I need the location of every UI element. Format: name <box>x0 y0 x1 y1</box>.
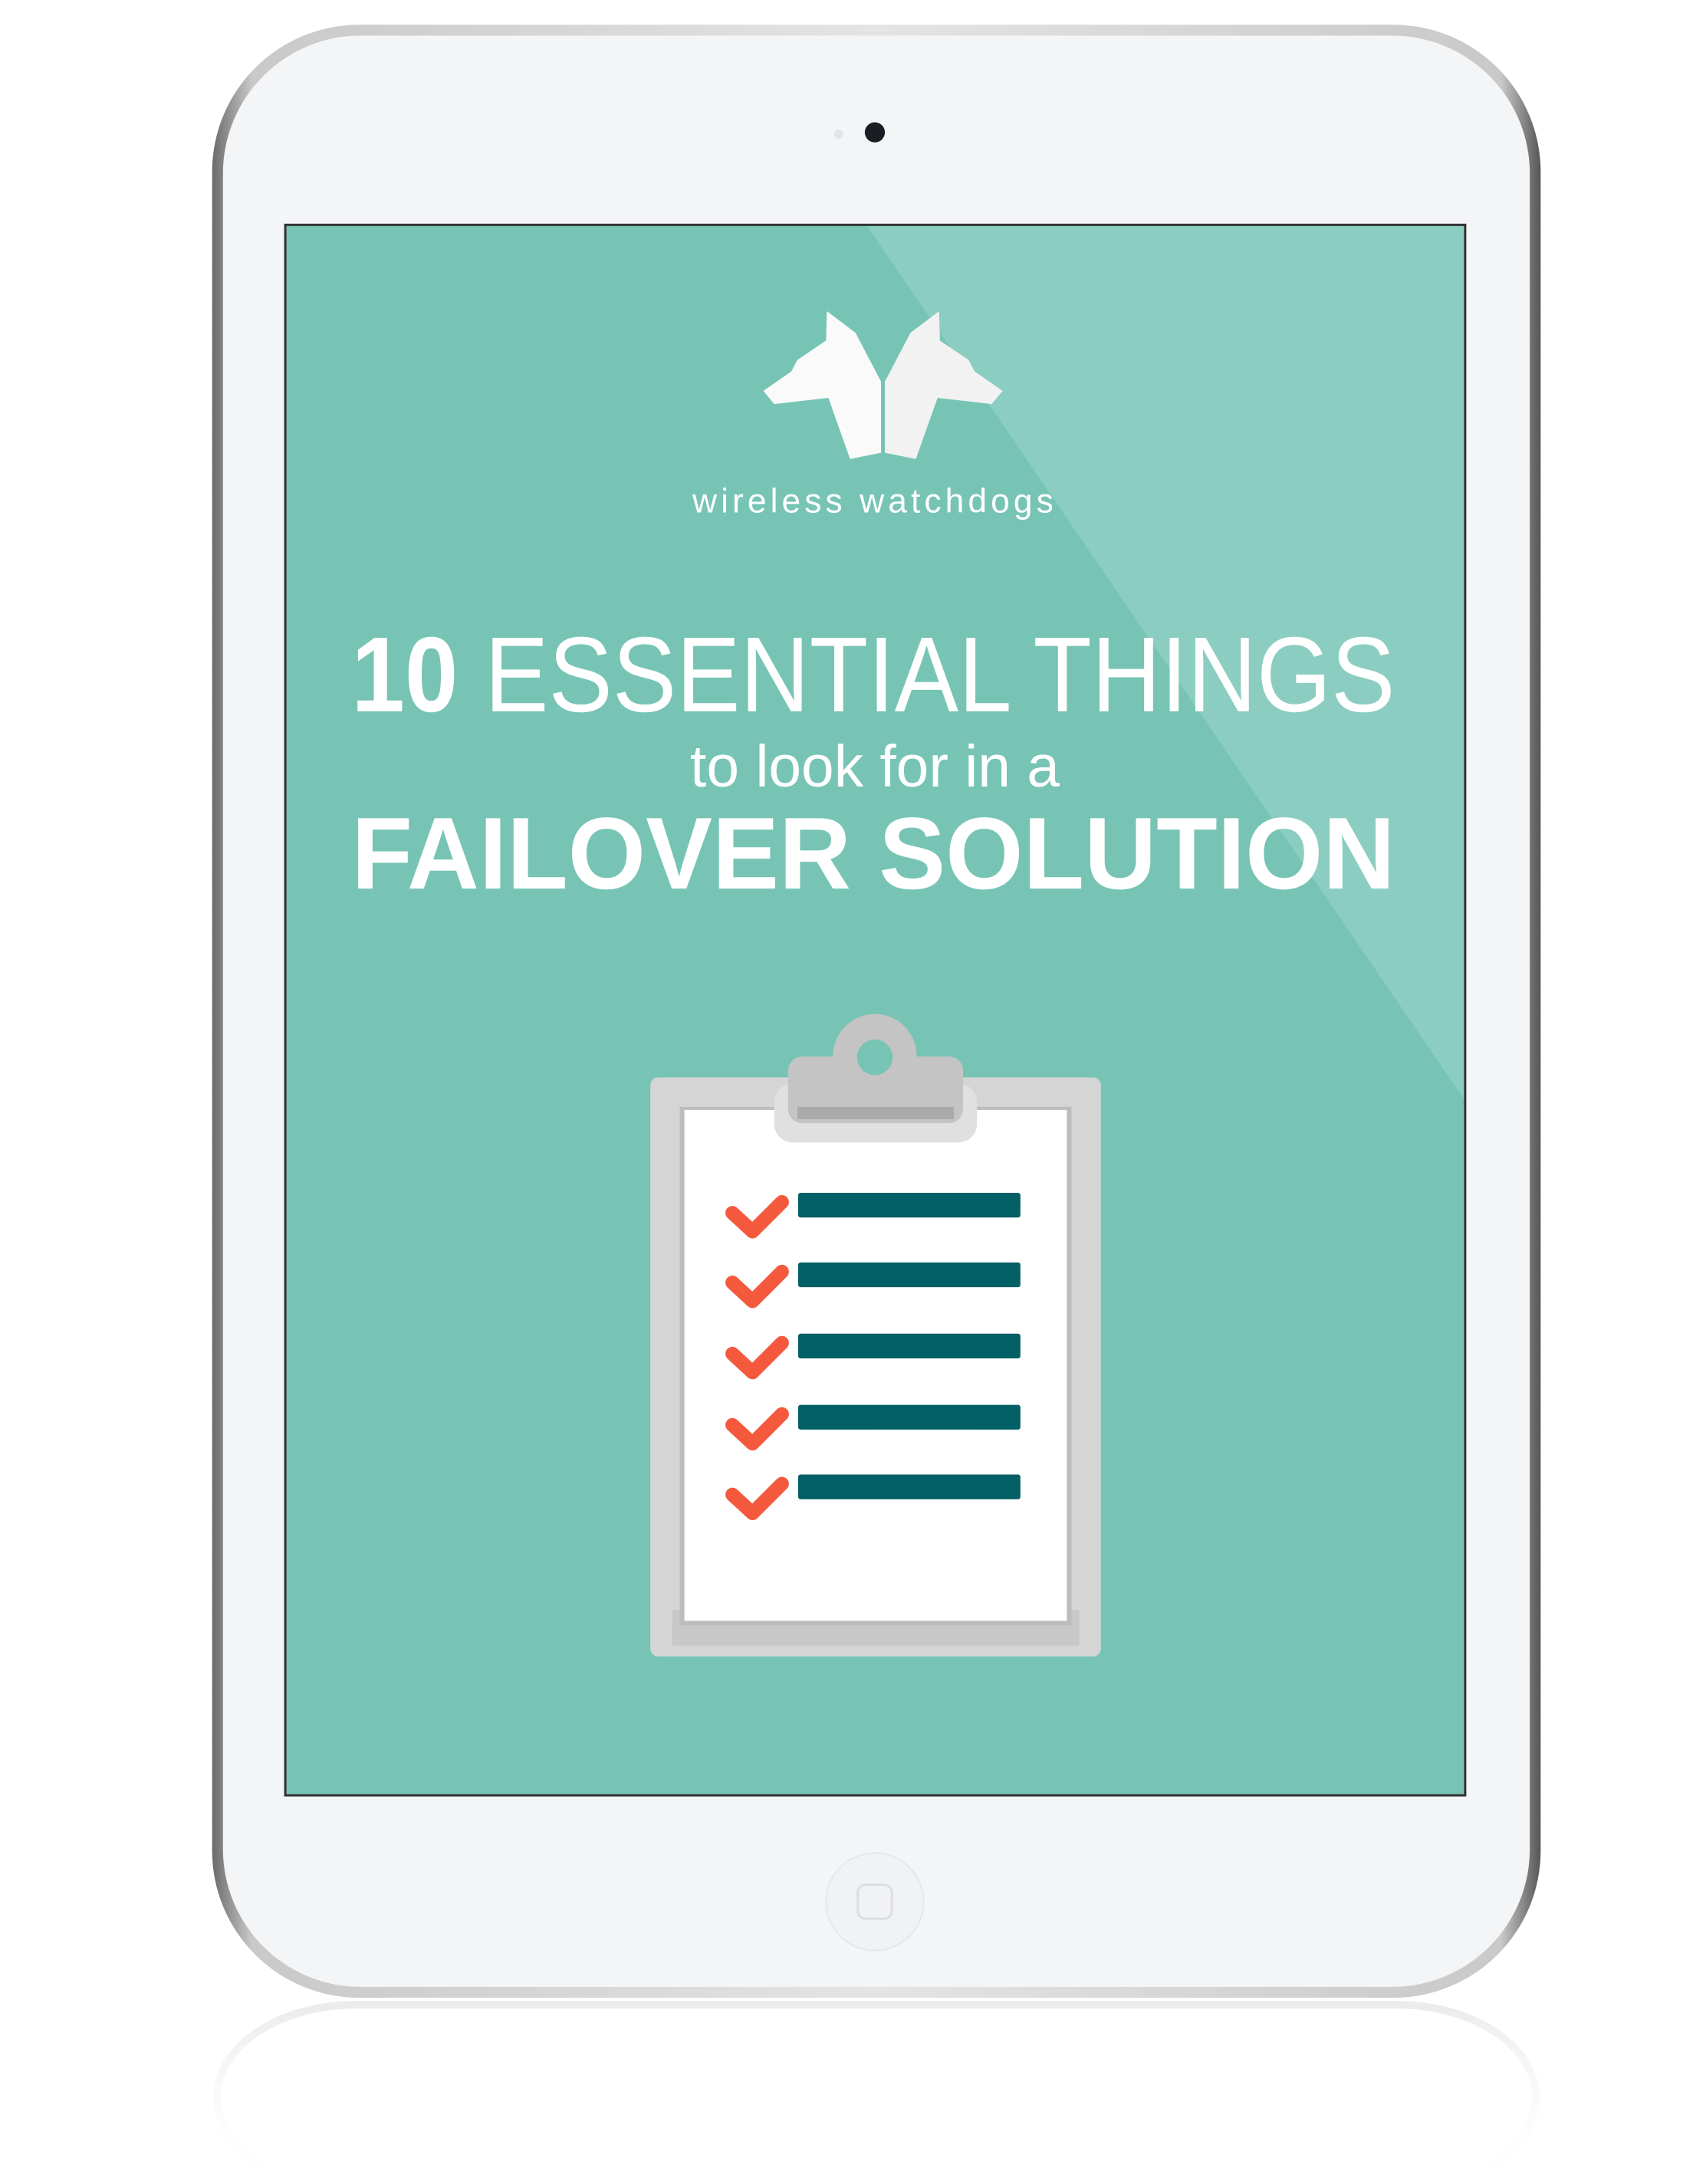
clipboard <box>650 1014 1101 1657</box>
logo: wireless watchdogs <box>692 311 1057 520</box>
camera <box>833 123 885 143</box>
screen <box>284 224 1466 1797</box>
tablet frame <box>212 25 1540 1998</box>
title: to look for in a <box>690 734 1060 800</box>
reflection <box>217 2005 1536 2184</box>
title <box>351 615 1395 911</box>
title: 10 ESSENTIAL THINGS <box>351 615 1395 734</box>
home button <box>826 1853 924 1950</box>
checklist <box>798 1193 1021 1499</box>
logo: wireless watchdogs: wireless watchdogs <box>692 482 1057 520</box>
title: FAILOVER SOLUTION <box>351 796 1395 911</box>
clip <box>774 1014 977 1142</box>
